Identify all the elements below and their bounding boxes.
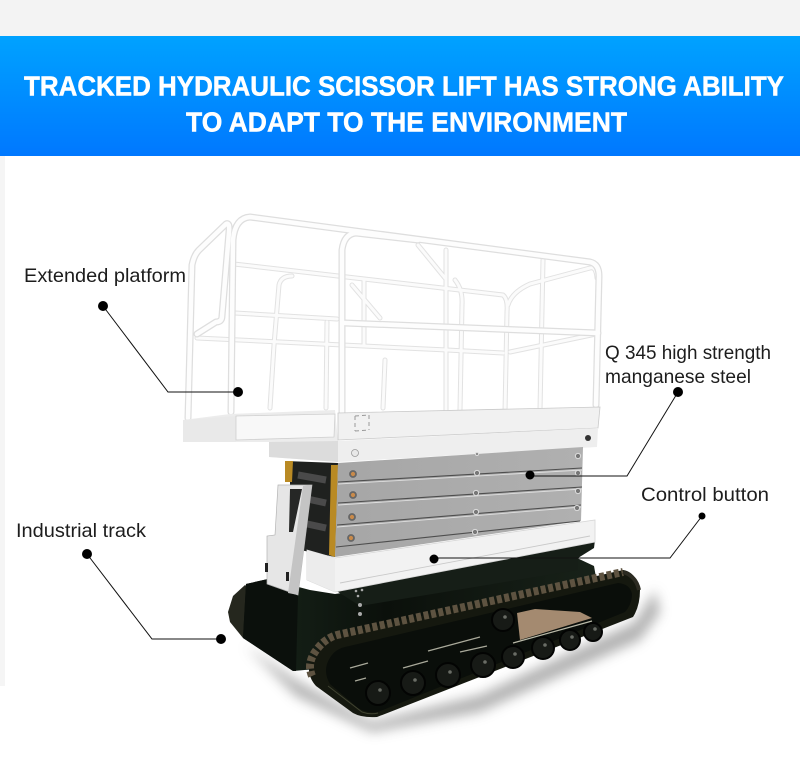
callout: Extended platform: [24, 265, 243, 397]
white main rails: [188, 217, 599, 418]
platform side panel: [338, 407, 600, 440]
rear track: [228, 585, 262, 640]
track inner window: [517, 609, 592, 640]
track road wheels: [366, 609, 602, 705]
scissor cavity: [285, 461, 338, 557]
callout: Extended platform: Extended platform: [24, 265, 186, 287]
guard rail assembly: [188, 217, 599, 418]
callout: Industrial track: Industrial track: [16, 520, 146, 542]
top background strip: [0, 0, 800, 36]
platform under beam: [269, 428, 598, 462]
scissor lift machine: [183, 217, 660, 732]
track chassis body: [243, 558, 600, 671]
title banner: TO ADAPT TO THE ENVIRONMENT: [186, 106, 627, 138]
back and side rails: [197, 245, 597, 412]
extended platform deck: [183, 410, 338, 442]
dark base under beam: [335, 540, 595, 606]
track lower highlight: [328, 686, 378, 714]
arm bolts: [348, 471, 356, 541]
callout: Q 345 steel: Q 345 high strength: [605, 342, 771, 364]
left edge strip: [0, 156, 5, 686]
callout: Q 345 steel: [526, 342, 771, 480]
chain bolts: [355, 589, 363, 616]
main rail shading: [188, 217, 599, 418]
control box: [265, 485, 312, 595]
crawler track: [309, 570, 640, 717]
callout: Control button: [430, 484, 769, 564]
title banner: [0, 36, 800, 156]
white base beam: [307, 520, 595, 592]
callout: Q 345 steel: manganese steel: [605, 366, 751, 388]
callout: Control button: Control button: [641, 484, 769, 506]
callout: Industrial track: [16, 520, 226, 644]
ground shadow: [245, 590, 660, 732]
scissor arm stack: [335, 447, 583, 557]
